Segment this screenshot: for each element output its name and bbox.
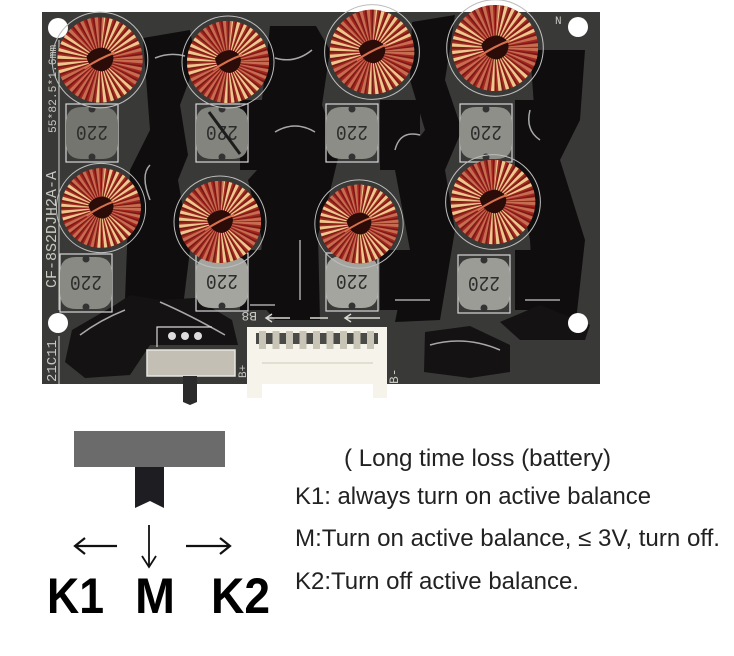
heading note: ( Long time loss (battery) bbox=[344, 445, 611, 472]
white battery connector bbox=[247, 327, 387, 398]
glue: lower potting blobs bbox=[65, 295, 590, 378]
silkscreen labels: B- bbox=[387, 368, 402, 384]
glue highlights bbox=[80, 50, 560, 350]
silkscreen labels: 21C11 bbox=[45, 340, 61, 382]
label: K1: K1 bbox=[47, 568, 104, 624]
scratch across second inductor bbox=[209, 112, 240, 154]
K1 description: K1: always turn on active balance bbox=[295, 483, 651, 510]
toroid coils, lower row bbox=[56, 155, 540, 268]
inductors, upper row bbox=[66, 104, 512, 162]
silkscreen labels: 55*82.5*1.6mm bbox=[48, 45, 60, 133]
board base bbox=[42, 12, 600, 384]
text block: switch mode descriptions bbox=[295, 445, 720, 595]
silkscreen labels: B8 bbox=[241, 308, 257, 323]
arrow: left to K1 bbox=[75, 538, 117, 554]
arrow: down to M bbox=[142, 525, 156, 567]
slide switch on board bbox=[147, 327, 235, 405]
switch diagram bbox=[47, 431, 270, 624]
label: K2: K2 bbox=[211, 568, 270, 624]
M description: M:Turn on active balance, ≤ 3V, turn off. bbox=[295, 525, 720, 552]
silkscreen labels bbox=[44, 16, 562, 384]
silkscreen labels: N bbox=[555, 16, 562, 28]
silkscreen arrows bbox=[266, 314, 380, 322]
toroid coils, upper row bbox=[52, 0, 543, 108]
switch lever bbox=[135, 467, 164, 508]
label: M: M bbox=[135, 568, 175, 624]
silkscreen border line bbox=[58, 40, 60, 384]
silkscreen labels: CF-8S2DJH2A-A bbox=[44, 171, 61, 288]
K2 description: K2:Turn off active balance. bbox=[295, 568, 579, 595]
panel: circuit board photo bbox=[42, 0, 600, 405]
switch body bbox=[74, 431, 225, 467]
mounting holes bbox=[48, 17, 588, 333]
silkscreen labels: B+ bbox=[238, 365, 250, 378]
glue: upper and central potting blobs bbox=[125, 15, 585, 330]
arrow: right to K2 bbox=[186, 538, 230, 554]
inductors, lower row bbox=[60, 253, 510, 313]
